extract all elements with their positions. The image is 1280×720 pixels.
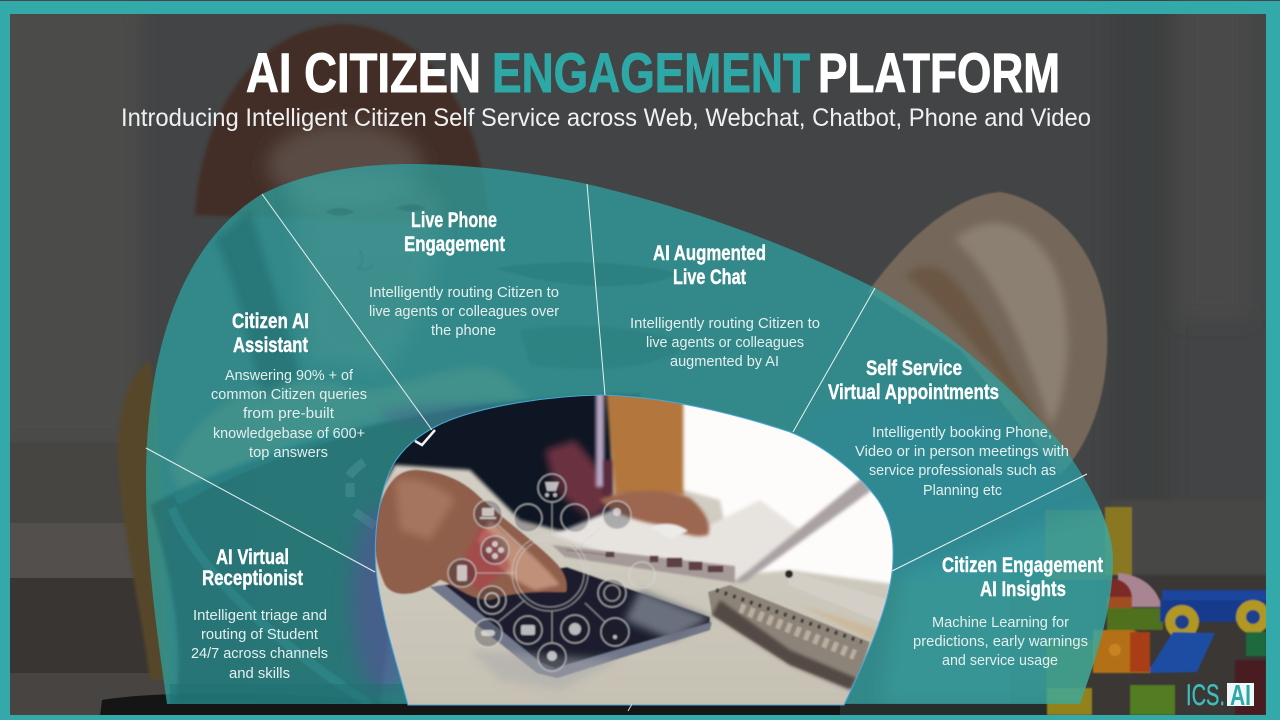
child hair	[868, 192, 1107, 475]
panel: AI Virtual Receptionist: Receptionist	[202, 567, 303, 590]
hand	[374, 470, 567, 600]
panel: Self Service Virtual Appointments: Intelligently booking Phone,	[872, 425, 1052, 441]
panel: Citizen Engagement AI Insights: and service usage	[942, 653, 1058, 669]
purple glow around photo	[346, 504, 402, 692]
panel: AI Augmented Live Chat: Intelligently routing Citizen to	[630, 316, 820, 332]
panel: Self Service Virtual Appointments: Self Service	[866, 357, 962, 380]
panel: Citizen AI Assistant: Citizen AI	[232, 310, 309, 333]
small tick under photo	[628, 704, 632, 711]
panel: Citizen Engagement AI Insights	[913, 554, 1103, 669]
laptop	[552, 500, 800, 582]
panel: Self Service Virtual Appointments: Video or in person meetings with	[855, 444, 1069, 460]
panel: Live Phone Engagement: Engagement	[404, 233, 505, 256]
dark monitor base	[100, 694, 900, 716]
typing hand	[600, 491, 709, 536]
panel: Self Service Virtual Appointments: service professionals such as	[869, 463, 1056, 479]
panel: AI Virtual Receptionist: Intelligent triage and	[193, 608, 327, 624]
panel: Self Service Virtual Appointments: Planning etc	[923, 483, 1002, 499]
title: ENGAGEMENT	[492, 41, 810, 104]
panel: AI Augmented Live Chat: live agents or colleagues	[646, 335, 804, 351]
title: PLATFORM	[818, 41, 1060, 104]
panel: Citizen AI Assistant	[211, 310, 367, 461]
panel: Citizen Engagement AI Insights: predictions, early warnings	[913, 634, 1088, 650]
panel: Live Phone Engagement: Live Phone	[411, 209, 497, 232]
woman hair	[195, 24, 492, 225]
woman shoulder	[118, 360, 170, 680]
panel: AI Augmented Live Chat: AI Augmented	[653, 242, 766, 265]
holographic icons	[448, 474, 655, 671]
panel: AI Virtual Receptionist: and skills	[229, 666, 290, 682]
panel: Self Service Virtual Appointments: Virtual Appointments	[828, 381, 999, 404]
panel: Citizen Engagement AI Insights: AI Insights	[980, 578, 1066, 601]
divider lines	[146, 184, 1087, 572]
panel: Citizen AI Assistant: common Citizen queries	[211, 387, 367, 403]
logo: ICS.AI: ICS.	[1186, 679, 1225, 712]
photo: hands on phone and laptop	[370, 390, 900, 710]
woman face and shoulder seen through teal	[170, 169, 530, 490]
panel: Citizen AI Assistant: top answers	[249, 445, 328, 461]
logo: ICS.AI: AI	[1230, 680, 1251, 712]
panel: Citizen AI Assistant: Assistant	[233, 334, 308, 357]
dark sleeve background	[384, 396, 614, 533]
panel: Live Phone Engagement: Intelligently routing Citizen to	[369, 285, 559, 301]
panel: Self Service Virtual Appointments	[828, 357, 1069, 499]
title	[246, 41, 1060, 104]
panel: AI Virtual Receptionist: 24/7 across channels	[191, 646, 328, 662]
panel: Citizen Engagement AI Insights: Machine Learning for	[932, 615, 1069, 631]
panel: Live Phone Engagement: live agents or colleagues over	[369, 304, 559, 320]
panel: AI Virtual Receptionist	[191, 546, 328, 682]
child sweater tint	[827, 414, 1113, 704]
panel: Live Phone Engagement	[369, 209, 559, 339]
phone	[430, 567, 710, 678]
title: AI CITIZEN	[246, 41, 481, 104]
panel: AI Augmented Live Chat: augmented by AI	[670, 354, 779, 370]
laptop lid reflection	[150, 262, 690, 704]
subtitle: Introducing Intelligent Citizen Self Service across Web, Webchat, Chatbot, Phone and Video	[121, 104, 1091, 132]
lego toys	[1047, 507, 1270, 715]
bright window	[684, 390, 900, 585]
panel: Citizen AI Assistant: Answering 90% + of	[225, 368, 354, 384]
panel: Citizen Engagement AI Insights: Citizen Engagement	[942, 554, 1103, 577]
panel: Citizen AI Assistant: from pre-built	[243, 406, 334, 422]
panel: AI Virtual Receptionist: AI Virtual	[216, 546, 289, 569]
panel: AI Augmented Live Chat	[630, 242, 820, 370]
panel: AI Virtual Receptionist: routing of Student	[201, 627, 318, 643]
notebook	[708, 585, 870, 690]
panel: AI Augmented Live Chat: Live Chat	[673, 266, 746, 289]
panel: Live Phone Engagement: the phone	[431, 323, 496, 339]
panel: Citizen AI Assistant: knowledgebase of 600+	[213, 426, 365, 442]
icon: check mark	[415, 430, 435, 445]
pen	[788, 574, 886, 621]
panel: teal arch	[140, 160, 1120, 720]
